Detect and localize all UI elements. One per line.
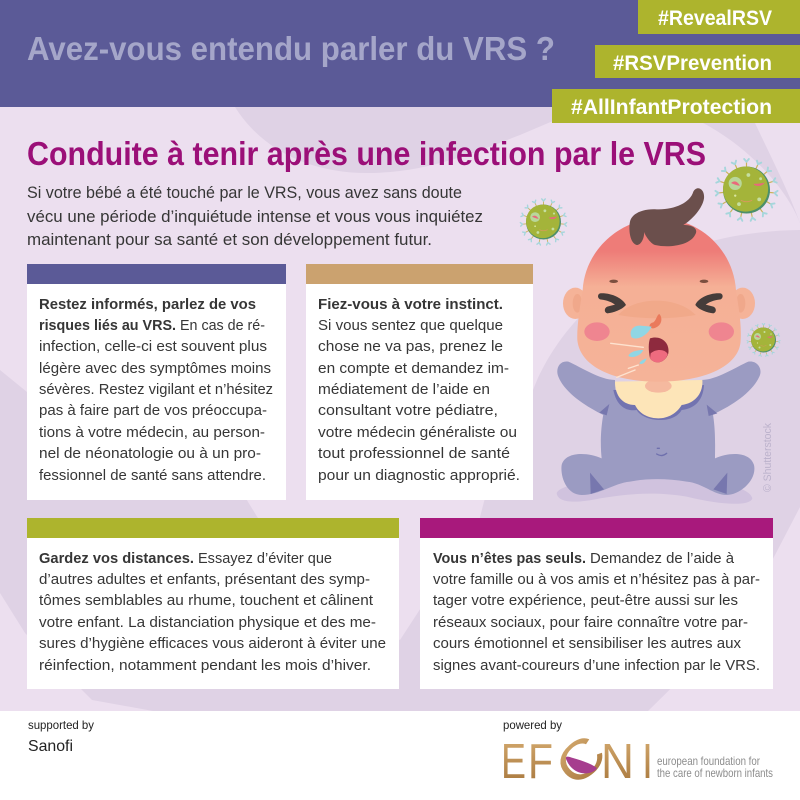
logo: EFCNI: F bbox=[528, 735, 553, 789]
panel: stay informed: tions à votre médecin, au person- bbox=[39, 424, 265, 441]
panel: trust your instinct: Fiez-vous à votre instinct. bbox=[318, 296, 503, 313]
panel: trust your instinct: consultant votre pédiatre, bbox=[318, 402, 498, 419]
panel: stay informed: sévères. Restez vigilant et n’hésitez bbox=[39, 381, 273, 398]
icon: floor shadow bbox=[557, 478, 752, 504]
panel: trust your instinct: chose ne va pas, prenez le bbox=[318, 338, 503, 355]
intro paragraph bbox=[27, 183, 483, 249]
intro paragraph: vécu une période d’inquiétude intense et vous vous inquiétez bbox=[27, 207, 483, 226]
panel: stay informed: nel de néonatologie ou à un pro- bbox=[39, 445, 261, 462]
footer: powered by: powered by bbox=[503, 718, 562, 732]
tag: RevealRSV: #RevealRSV bbox=[658, 7, 772, 30]
logo: EFCNI: E bbox=[501, 735, 526, 789]
logo: EFCNI bbox=[501, 724, 773, 798]
panel: keep your distance: tômes semblables au rhume, touchent et câlinent bbox=[39, 592, 374, 609]
panel: trust your instinct: tout professionnel de santé bbox=[318, 445, 510, 462]
panel: keep your distance: Essayez d’éviter que bbox=[198, 550, 332, 567]
tag: RSVPrevention: #RSVPrevention bbox=[613, 52, 772, 75]
panel: keep your distance: votre enfant. La distanciation physique et des me- bbox=[39, 614, 376, 631]
panel: you are not alone: votre famille ou à vos amis et n’hésitez pas à par- bbox=[433, 571, 760, 588]
logo: EFCNI: C bbox=[544, 724, 618, 798]
footer: supported by: Sanofi bbox=[28, 738, 73, 755]
icon: baby in logo bbox=[566, 757, 597, 773]
panel: you are not alone: signes avant-coureurs d’une infection par le VRS. bbox=[433, 657, 760, 674]
icon: virus left bbox=[520, 199, 567, 245]
logo: EFCNI: N bbox=[601, 735, 634, 789]
footer: supported by: supported by bbox=[28, 718, 94, 732]
panel: stay informed: Restez informés, parlez de vos bbox=[39, 296, 256, 313]
panel: trust your instinct bbox=[306, 264, 533, 500]
footer: supported by bbox=[28, 718, 94, 755]
panel: keep your distance: d’autres adultes et enfants, présentant des symp- bbox=[39, 571, 370, 588]
panel: stay informed: pas à faire part de vos préoccupa- bbox=[39, 402, 267, 419]
tag: RevealRSV bbox=[638, 0, 800, 34]
panel: stay informed: fessionnel de santé sans attendre. bbox=[39, 467, 266, 484]
panel: you are not alone: tager votre expérience, peut-être aussi sur les bbox=[433, 592, 738, 609]
intro paragraph: maintenant pour sa santé et son développement futur. bbox=[27, 230, 432, 249]
hashtag tags bbox=[552, 0, 800, 123]
logo tagline: the care of newborn infants bbox=[657, 766, 773, 780]
panel: stay informed bbox=[27, 264, 286, 500]
image credit: © Shutterstock bbox=[762, 423, 774, 492]
intro paragraph: Si votre bébé a été touché par le VRS, vous avez sans doute bbox=[27, 183, 462, 202]
panel: you are not alone: Demandez de l’aide à bbox=[590, 550, 735, 567]
tag: RSVPrevention bbox=[595, 45, 800, 78]
logo tagline: european foundation for bbox=[657, 754, 760, 768]
panel: trust your instinct: pour un diagnostic approprié. bbox=[318, 467, 520, 484]
panel: keep your distance: sures d’hygiène efficaces vous aideront à éviter une bbox=[39, 635, 386, 652]
main question title: Avez-vous entendu parler du VRS ? bbox=[27, 30, 555, 67]
logo: EFCNI: I bbox=[642, 735, 653, 789]
panel: stay informed: risques liés au VRS. bbox=[39, 317, 176, 334]
tag: AllInfantProtection bbox=[552, 89, 800, 123]
icon: right squeezed eye bbox=[695, 293, 723, 313]
header band bbox=[0, 0, 800, 107]
panel: trust your instinct: votre médecin généraliste ou bbox=[318, 424, 517, 441]
panel: stay informed: En cas de ré- bbox=[180, 317, 265, 334]
panel: stay informed: légère avec des symptômes moins bbox=[39, 360, 271, 377]
tag: AllInfantProtection: #AllInfantProtection bbox=[571, 96, 772, 119]
icon: left squeezed eye bbox=[598, 293, 626, 313]
panel: you are not alone: réseaux sociaux, pour faire connaître votre par- bbox=[433, 614, 748, 631]
heading: Conduite à tenir après une infection par le VRS bbox=[27, 135, 706, 172]
icon: virus small right bbox=[747, 324, 780, 356]
panel: you are not alone bbox=[420, 518, 773, 689]
illustration: sneezing baby bbox=[557, 188, 761, 504]
panel: trust your instinct: médiatement de l’aide en bbox=[318, 381, 490, 398]
icon: baby body bbox=[557, 361, 761, 495]
panel: keep your distance: Gardez vos distances. bbox=[39, 550, 194, 567]
panel: trust your instinct: Si vous sentez que quelque bbox=[318, 317, 503, 334]
panel: trust your instinct: en compte et demandez im- bbox=[318, 360, 509, 377]
panel: you are not alone: cours émotionnel et sensibiliser les autres aux bbox=[433, 635, 741, 652]
panel: you are not alone: Vous n’êtes pas seuls. bbox=[433, 550, 586, 567]
panel: keep your distance bbox=[27, 518, 399, 689]
icon: baby head bbox=[563, 188, 755, 393]
panel: keep your distance: réinfection, notamment pendant les mois d’hiver. bbox=[39, 657, 371, 674]
logo tagline bbox=[657, 754, 773, 780]
icon: virus large top right bbox=[715, 159, 778, 221]
panel: stay informed: infection, celle-ci est souvent plus bbox=[39, 338, 267, 355]
